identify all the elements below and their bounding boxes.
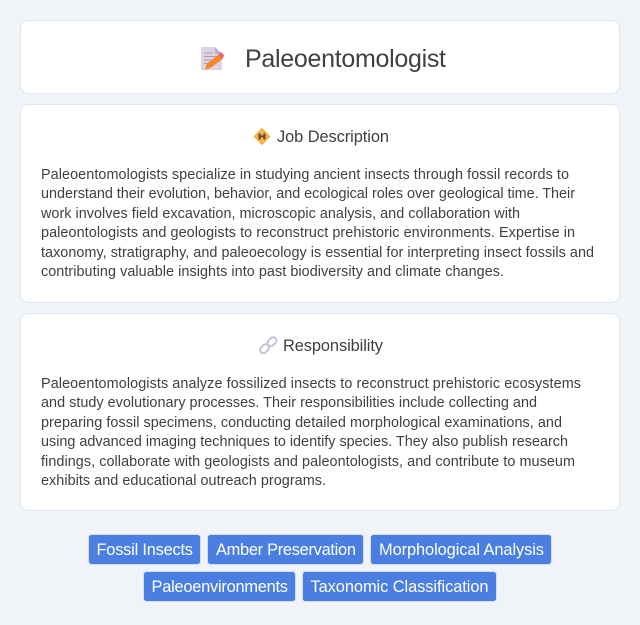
heading: job description: Job Description [277, 128, 389, 146]
text block: responsibility: using advanced imaging techniques to identify species. They also publish research [41, 434, 568, 450]
tag: Taxonomic Classification: Taxonomic Classification [310, 578, 488, 596]
text block: job description: Paleoentomologists specialize in studying ancient insects through fossil records to [41, 167, 569, 183]
text block: job description: taxonomy, stratigraphy, and paleoecology is essential for interpreting insect fossils and [41, 245, 594, 261]
text block: responsibility: preparing fossil specimens, conducting detailed morphological examinations, and [41, 415, 562, 431]
icon: document with pencil [201, 47, 224, 70]
title: Paleoentomologist [245, 45, 446, 73]
tag: Amber Preservation: Amber Preservation [216, 541, 356, 559]
text block: job description [40, 167, 594, 280]
panel: responsibility [20, 314, 620, 510]
tag: Amber Preservation [208, 534, 364, 564]
panel: title card [20, 20, 620, 94]
icon: chain link [259, 336, 278, 355]
text block: job description: contributing valuable insights into past biodiversity and climate changes. [41, 264, 504, 280]
text block: job description: work involves field excavation, microscopic analysis, and collaboration with [40, 206, 520, 222]
text block: responsibility: and study evolutionary processes. Their responsibilities include collecting and [41, 395, 537, 411]
text block: responsibility: Paleoentomologists analyze fossilized insects to reconstruct prehistoric ecosystems [41, 376, 581, 392]
text block: job description: understand their evolution, behavior, and ecological roles over geological time. Their [41, 186, 575, 202]
tag: Fossil Insects [88, 534, 200, 564]
tag: Morphological Analysis [370, 534, 552, 564]
tag: Fossil Insects: Fossil Insects [96, 541, 193, 559]
tag: Paleoenvironments: Paleoenvironments [152, 578, 288, 596]
tag: Morphological Analysis: Morphological Analysis [379, 541, 544, 559]
heading: responsibility: Responsibility [283, 337, 384, 355]
text block: responsibility: exhibits and educational outreach programs. [41, 473, 326, 489]
text block: responsibility: findings, collaborate with geologists and paleontologists, and contribute to museum [41, 454, 575, 470]
text block: responsibility [41, 376, 581, 489]
panel: job description [20, 104, 620, 302]
icon: amber diamond sign [254, 128, 270, 144]
text block: job description: paleontologists and geologists to reconstruct prehistoric environments. Expertise in [41, 225, 575, 241]
tag: Paleoenvironments [144, 572, 296, 602]
tag: Taxonomic Classification [302, 572, 496, 602]
